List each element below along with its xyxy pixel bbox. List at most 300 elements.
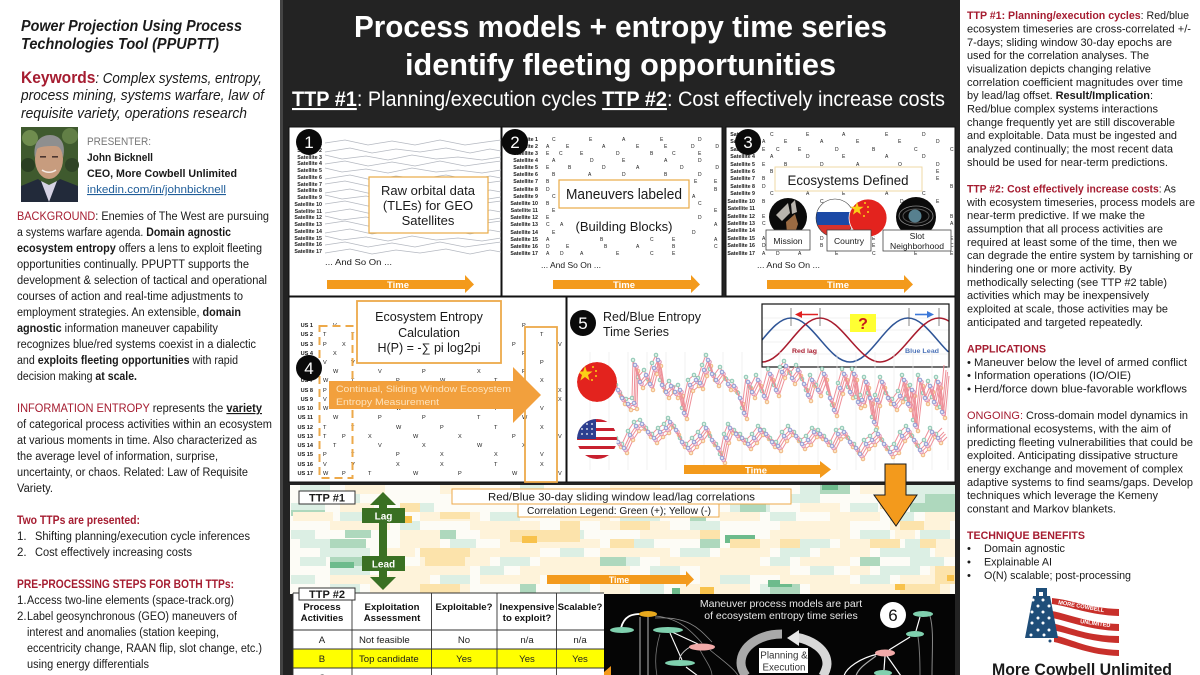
maneuver letter grid: BE (762, 176, 940, 182)
technique benefits (967, 530, 1131, 582)
US labels: US 2 (301, 332, 313, 338)
process graph left (610, 611, 738, 675)
TTP 1 text: by lead/lag offset. Result/Implication: (967, 90, 1153, 102)
ongoing: adaptive systems to find seams/gaps. Develop (967, 477, 1193, 489)
callout: entropy calculation: Ecosystem Entropy (375, 310, 484, 324)
TTP 2 text: with ecosystem timeseries, process models are (966, 197, 1195, 209)
satellite labels: Satellite 6 (730, 169, 755, 175)
background text: agnostic information maneuver capability (17, 323, 218, 335)
badge 2: 2 (510, 133, 520, 152)
letter grid: PXPV (323, 342, 562, 348)
badge 4 (296, 355, 322, 381)
presenter details: John Bicknell (87, 152, 153, 164)
letter grid: WPPTW (333, 415, 528, 421)
icon: slot neighborhood (896, 197, 936, 237)
pre-processing steps: Access two-line elements (space-track.org) (27, 595, 234, 607)
right column (966, 10, 1195, 675)
two TTPs list (17, 515, 250, 559)
satellite labels: Satellite 10 (727, 199, 755, 205)
letter grid: VX (323, 397, 562, 403)
label: TTP 1: TTP #1 (309, 492, 345, 504)
maneuver letter grid: BCDE (762, 199, 940, 205)
technique benefits: Domain agnostic (984, 543, 1065, 555)
satellite labels: Satellite 15 (510, 237, 538, 243)
information entropy text: of categorical process activities within an ecosystem (17, 419, 272, 431)
callout: maneuvers labeled (559, 180, 689, 208)
table header: Inexpensive (500, 602, 554, 613)
label: red lag: Red lag (792, 348, 817, 355)
applications: • Information operations (IO/OIE) (967, 370, 1131, 382)
heading (603, 310, 702, 339)
row A: Not feasible (359, 635, 410, 646)
satellite labels: Satellite 13 (294, 222, 322, 228)
letter grid: WTPWTX (323, 378, 544, 384)
satellite labels: Satellite 10 (294, 202, 322, 208)
maneuver letter grid: ECEDBCC (762, 147, 954, 153)
TTP 2 text (966, 184, 1195, 329)
heading: Time Series (603, 325, 669, 339)
arrow: blue lead (915, 311, 934, 318)
table header: Assessment (364, 613, 421, 624)
series: blue entropy (610, 418, 947, 463)
maneuver letter grid: ADEAD (552, 158, 702, 164)
arrow: continual sliding window (329, 367, 541, 423)
two TTPs list: 1. (17, 531, 27, 543)
US labels: US 15 (297, 452, 313, 458)
panel 4: ecosystem entropy calculation (289, 297, 566, 482)
US labels: US 13 (297, 434, 313, 440)
maneuver letter grid: BE (770, 169, 940, 175)
applications: APPLICATIONS (967, 344, 1047, 356)
satellite labels: Satellite 7 (513, 179, 538, 185)
table header: Exploitable? (435, 602, 493, 613)
maneuver letter grid: ABCEA (546, 237, 718, 243)
arrow: time: Time (827, 280, 849, 291)
arrow: red lag (795, 311, 818, 318)
TTP 2 text: anticipated and targeted repeatedly. (967, 317, 1143, 329)
arrow tip (604, 666, 611, 675)
row B: Yes (519, 654, 535, 665)
satellite labels: Satellite 1 (513, 137, 538, 143)
callout: raw orbital data (369, 177, 488, 233)
satellite labels: Satellite 14 (294, 229, 322, 235)
arrow: continual sliding window: Entropy Measurement (336, 397, 440, 407)
satellite labels: Satellite 13 (510, 222, 538, 228)
row A: n/a (520, 635, 534, 646)
background text: development & selection of tactical and operational (17, 275, 267, 287)
technique benefits: Explainable AI (984, 556, 1052, 568)
ongoing (967, 410, 1193, 516)
US labels: US 16 (297, 462, 313, 468)
cycle arrows (741, 630, 827, 675)
satellite labels: Satellite 8 (513, 187, 538, 193)
logo: more cowbell (1025, 588, 1119, 656)
main title: identify fleeting opportunities (405, 47, 836, 82)
maneuver letter grid: CEAED (552, 137, 702, 143)
satellite labels: Satellite 2 (513, 144, 538, 150)
satellite labels: Satellite 6 (297, 175, 322, 181)
row B: Top candidate (359, 654, 419, 665)
TTP 1 text: TTP #1: Planning/execution cycles: Red/blue (967, 10, 1189, 22)
maneuver letter grid: ECEDBCE (546, 151, 702, 157)
satellite labels: Satellite 12 (510, 215, 538, 221)
icon: russia outline (816, 199, 854, 237)
maneuver letter grid: CAA (546, 222, 718, 228)
US labels: US 6 (301, 369, 313, 375)
letter grid: WVPXP (333, 369, 526, 375)
row A: n/a (573, 635, 587, 646)
information entropy text: at various moments in time. Also characterized as (17, 435, 257, 447)
label: lead: Lead (372, 560, 395, 570)
satellite labels: Satellite 16 (294, 242, 322, 248)
heat cells (291, 485, 955, 594)
label: slot neighborhood: Slot (910, 231, 925, 241)
label: mission: Mission (773, 236, 803, 246)
satellite labels: Satellite 17 (727, 251, 755, 257)
applications: • Herd/force down blue-favorable workflows (967, 384, 1187, 396)
label: TTP 1 (299, 491, 355, 504)
letter grid: XP (333, 351, 526, 357)
satellite labels: Satellite 16 (510, 244, 538, 250)
label: blue lead: Blue Lead (905, 348, 939, 355)
heading: Maneuver process models are part (700, 598, 862, 610)
ongoing: constant and Markov blankets. (967, 504, 1116, 516)
chart grid (590, 352, 948, 470)
left column (17, 18, 272, 671)
TTP 1 text: and exploitable. Data must be ingested and (967, 130, 1177, 142)
satellite labels: Satellite 17 (294, 249, 322, 255)
presenter details: PRESENTER: (87, 136, 151, 148)
satellite labels: Satellite 9 (730, 191, 755, 197)
background text: courses of action and real-time adjustments to (17, 291, 243, 303)
technique benefits: • (967, 543, 971, 555)
satellite labels: Satellite 2 (297, 148, 322, 154)
table header: Process (303, 602, 341, 613)
TTP 2 text: methodically selecting (see TTP #2 table) (967, 277, 1167, 289)
background text: and exploits fleeting opportunities with rapid (17, 355, 238, 367)
ongoing: ONGOING: Cross-domain model dynamics in (967, 410, 1188, 422)
table header: Activities (301, 613, 343, 624)
arrow: time (684, 461, 831, 478)
maneuver letter grid: EBDAD D (546, 165, 719, 171)
icon: china flag (849, 199, 887, 237)
panel: TTP 1 heatmap (290, 485, 955, 594)
TTP 2 text: exploited at scale, those activities may be (967, 304, 1168, 316)
orbital traces (325, 140, 501, 254)
badge 1: 1 (304, 133, 314, 152)
label: TTP 2: TTP #2 (309, 589, 345, 601)
letter grid (323, 323, 562, 477)
satellite labels: Satellite 4 (730, 154, 755, 160)
satellite labels: Satellite 2 (730, 139, 755, 145)
and so on: ... And So On ... (757, 260, 820, 270)
satellite labels: Satellite 12 (294, 215, 322, 221)
keywords: Keywords: Complex systems, entropy, (21, 68, 262, 87)
satellite labels: Satellite 3 (513, 151, 538, 157)
TTP 1 text (967, 10, 1191, 169)
logo: more cowbell: MORE COWBELL (1058, 600, 1105, 614)
table header (301, 602, 603, 624)
two TTPs list: Two TTPs are presented: (17, 515, 140, 527)
arrow: time: Time (609, 575, 629, 585)
icon: mission satellite (769, 198, 807, 236)
US labels: US 11 (298, 415, 313, 421)
satellite labels (294, 141, 322, 255)
badge 5: 5 (578, 314, 588, 333)
TTP 2 text: TTP #2: Cost effectively increase costs: As (967, 184, 1176, 196)
panel 6: process models (604, 594, 955, 675)
row B: Yes (572, 654, 588, 665)
US labels: US 3 (301, 342, 313, 348)
satellite labels: Satellite 3 (730, 147, 755, 153)
badge 6 (880, 602, 906, 628)
main title: Process models + entropy time series (354, 9, 887, 44)
title: tool name (21, 18, 242, 53)
keywords: requisite variety, operations research (21, 106, 247, 122)
satellite labels: Satellite 9 (297, 195, 322, 201)
satellite labels: Satellite 14 (727, 228, 755, 234)
US labels: US 12 (297, 425, 313, 431)
satellite labels: Satellite 3 (297, 155, 322, 161)
TTP 1 text: 7-days; sliding window 30-day epochs are (967, 37, 1172, 49)
TTP 1 text: change frequently yet are still discoverable (967, 117, 1175, 129)
text: building blocks: (Building Blocks) (576, 220, 672, 234)
TTP 1 text: ecosystem timeseries are cross-correlated +/- (967, 24, 1191, 36)
maneuver letter grid (546, 137, 719, 257)
US labels (297, 323, 314, 477)
maneuver letter grid: ED (552, 230, 696, 236)
satellite labels: Satellite 4 (297, 161, 322, 167)
maneuver letter grid: DB (762, 184, 954, 190)
callout: ecosystems defined: Ecosystems Defined (788, 173, 908, 188)
satellite labels: Satellite 15 (727, 236, 755, 242)
callout: raw orbital data: Satellites (402, 213, 455, 228)
row B: Yes (456, 654, 472, 665)
TTP 2 text: near-term predictive. If we make the (967, 210, 1145, 222)
information entropy text: the average level of information, surprise, (17, 451, 218, 463)
and so on: ... And So On ... (541, 260, 601, 270)
badge 4: 4 (304, 359, 314, 378)
grid lines (293, 593, 604, 675)
label: lag: Lag (375, 512, 392, 522)
technique benefits: O(N) scalable; post-processing (984, 570, 1131, 582)
arrow: continual sliding window: Continual, Sliding Window Ecosystem (336, 384, 511, 394)
applications (967, 344, 1188, 396)
logo: more cowbell: UNLIMITED (1080, 619, 1111, 629)
US labels: US 5 (301, 360, 313, 366)
presenter details: CEO, More Cowbell Unlimited (87, 168, 237, 180)
label: slot neighborhood: Neighborhood (890, 241, 944, 251)
maneuver letter grid: BC (546, 201, 702, 207)
text: building blocks (565, 214, 685, 236)
maneuver letter grid: EB (762, 214, 954, 220)
letter grid: TVXWX (333, 443, 526, 449)
satellite labels: Satellite 7 (730, 176, 755, 182)
legend: Correlation Legend: Green (+); Yellow (-) (527, 506, 711, 517)
TTP 2 text: can degrade the entire system by tarnishing or (967, 250, 1193, 262)
maneuver letter grid: BEE (546, 179, 718, 185)
badge 3 (735, 129, 761, 155)
panel 2: maneuvers labeled (502, 127, 722, 296)
label: mission (766, 230, 810, 250)
label: planning and execution: Execution (762, 662, 806, 674)
icon: russia flag (816, 212, 851, 235)
sliding window solid box (525, 327, 557, 482)
row A (319, 635, 587, 646)
maneuver letter grid: ADAECE (546, 251, 676, 257)
heading: of ecosystem entropy time series (704, 610, 858, 622)
background text: employment strategies. An extensible, domain (17, 307, 241, 319)
keywords (20, 68, 266, 122)
arrow: down to heatmap (874, 464, 917, 526)
maneuver letter grid: AEAEED D (546, 144, 719, 150)
maneuver letter grid (762, 132, 954, 257)
letter grid: PTPXXV (323, 452, 544, 458)
label: slot neighborhood (883, 230, 951, 251)
row A: No (458, 635, 470, 646)
table header: to exploit? (503, 613, 551, 624)
two TTPs list: 2. (17, 547, 27, 559)
table header: Scalable? (558, 602, 603, 613)
technique benefits: TECHNIQUE BENEFITS (967, 530, 1085, 542)
table: TTP 2 exploitation assessment (293, 588, 604, 675)
and so on: ... And So On ... (325, 257, 392, 267)
heading (700, 598, 862, 622)
series: red entropy (610, 355, 949, 431)
TTP 1 text: visualization depicts changing relative (967, 64, 1151, 76)
maneuver letter grid: CA (552, 194, 696, 200)
badge 6: 6 (888, 606, 898, 625)
US labels: US 4 (301, 351, 314, 357)
title: tool name: Power Projection Using Process (21, 18, 242, 35)
two TTPs list: Cost effectively increasing costs (35, 547, 192, 559)
presenter photo (21, 127, 79, 202)
background text: a systems warfare agenda. Domain agnostic (17, 227, 232, 239)
process graph right (844, 611, 933, 675)
maneuver letter grid: DEBABC (546, 244, 718, 250)
label: planning and execution (759, 648, 808, 674)
maneuver letter grid: AEAEED (762, 139, 940, 145)
satellite labels (727, 132, 755, 257)
satellite labels: Satellite 5 (513, 165, 538, 171)
table header: Exploitation (365, 602, 420, 613)
information entropy text (17, 403, 272, 495)
ongoing: exploited. Anticipating dissipative structure (967, 450, 1178, 462)
TTP 2 text: activities which may be inexpensively (967, 290, 1149, 302)
satellite labels: Satellite 14 (510, 230, 538, 236)
pre-processing steps: eccentricity change, RAAN flip, slot change, etc.) (27, 643, 262, 655)
pre-processing steps: 2. (17, 611, 27, 623)
letter grid: WWTV (323, 406, 544, 412)
highlighted row (293, 649, 604, 668)
satellite labels: Satellite 10 (510, 201, 538, 207)
badge 2 (502, 129, 528, 155)
background text (17, 211, 269, 383)
panel 3: ecosystems defined (726, 127, 955, 296)
information entropy text: Variety. (17, 483, 53, 495)
row A: A (319, 635, 326, 646)
US labels: US 10 (297, 406, 313, 412)
maneuver letter grid: DB (546, 187, 718, 193)
technique benefits: • (967, 556, 971, 568)
row B: B (319, 654, 325, 665)
background text: decision making at scale. (17, 371, 137, 383)
presenter details: inkedin.com/in/johnbicknell (87, 184, 226, 196)
pre-processing steps (17, 579, 262, 671)
satellite labels: Satellite 13 (727, 221, 755, 227)
US labels: US 9 (301, 397, 313, 403)
two TTPs list: Shifting planning/execution cycle inferences (35, 531, 250, 543)
background text: ecosystem entropy offers a lens to exploit fleeting (17, 243, 262, 255)
TTP 1 text: Red/blue complex systems interactions (967, 104, 1158, 116)
satellite labels: Satellite 6 (513, 172, 538, 178)
panel 5: red/blue entropy time series (567, 297, 996, 482)
callout: entropy calculation: H(P) = -∑ pi log2pi (377, 341, 481, 355)
letter grid: TPXWXPV (323, 434, 562, 440)
background text: BACKGROUND: Enemies of The West are pursuing (17, 211, 269, 223)
maneuver letter grid: ADEAD (770, 154, 926, 160)
maneuver letter grid: CEAED (770, 132, 926, 138)
badge 3: 3 (743, 133, 753, 152)
maneuver letter grid: EBDAOD (762, 162, 940, 168)
TTP 1 text: should be used for near-term predictions. (967, 157, 1168, 169)
US labels: US 8 (301, 388, 313, 394)
badge 1 (296, 129, 322, 155)
information entropy text: uncertainty, or chaos. Related: Law of Requisite (17, 467, 248, 479)
satellite labels: Satellite 16 (727, 243, 755, 249)
label: country: Country (834, 236, 865, 246)
satellite labels: Satellite 15 (294, 236, 322, 242)
maneuver letter grid: ED (546, 215, 702, 221)
arrow: time (327, 275, 474, 293)
callout: correlations title (452, 489, 791, 504)
applications: • Maneuver below the level of armed conflict (967, 357, 1188, 369)
satellite labels (510, 137, 538, 257)
title: tool name: Technologies Tool (PPUPTT) (21, 36, 219, 53)
maneuver letter grid: CAEAC (770, 191, 926, 197)
arrow: time (553, 275, 700, 293)
maneuver letter grid: CA (762, 221, 954, 227)
satellite labels: Satellite 7 (297, 182, 322, 188)
letter grid: TTWPTX (323, 425, 544, 431)
pre-processing steps: Label geosynchronous (GEO) maneuvers of (27, 611, 238, 623)
callout: raw orbital data: (TLEs) for GEO (383, 198, 473, 213)
satellite labels: Satellite 9 (513, 194, 538, 200)
information entropy text: INFORMATION ENTROPY represents the variety (17, 403, 263, 415)
row B (319, 654, 588, 665)
satellite labels: Satellite 17 (510, 251, 538, 257)
US labels: US 7 (301, 378, 313, 384)
ongoing: predicting fleeting vulnerabilities that could be (967, 437, 1193, 449)
subtitle: TTP #1: Planning/execution cycles TTP #2: Cost effectively increase costs (292, 88, 945, 111)
TTP 2 text: assumption that all process activities are (967, 224, 1163, 236)
TTP 1 text: analyzed continually; the most recent data (967, 144, 1174, 156)
arrow: time: Time (387, 280, 409, 291)
maneuver letter grid: ADEE (762, 236, 954, 242)
US labels: US 14 (297, 443, 314, 449)
arrow: time: Time (613, 280, 635, 291)
letter grid: WPTWPWV (323, 471, 562, 477)
arrow: time (547, 571, 694, 587)
satellite labels: Satellite 8 (297, 188, 322, 194)
background text: recognizes blue/red systems coexist in a dialectic (17, 339, 256, 351)
pre-processing steps: using energy differentials (27, 659, 149, 671)
satellite labels: Satellite 11 (295, 209, 322, 215)
callout: entropy calculation (357, 301, 501, 363)
callout: maneuvers labeled: Maneuvers labeled (566, 187, 682, 203)
pre-processing steps: interest and anomalies (station keeping, (27, 627, 219, 639)
ongoing: techniques which leverage the Kemeny (967, 490, 1158, 502)
